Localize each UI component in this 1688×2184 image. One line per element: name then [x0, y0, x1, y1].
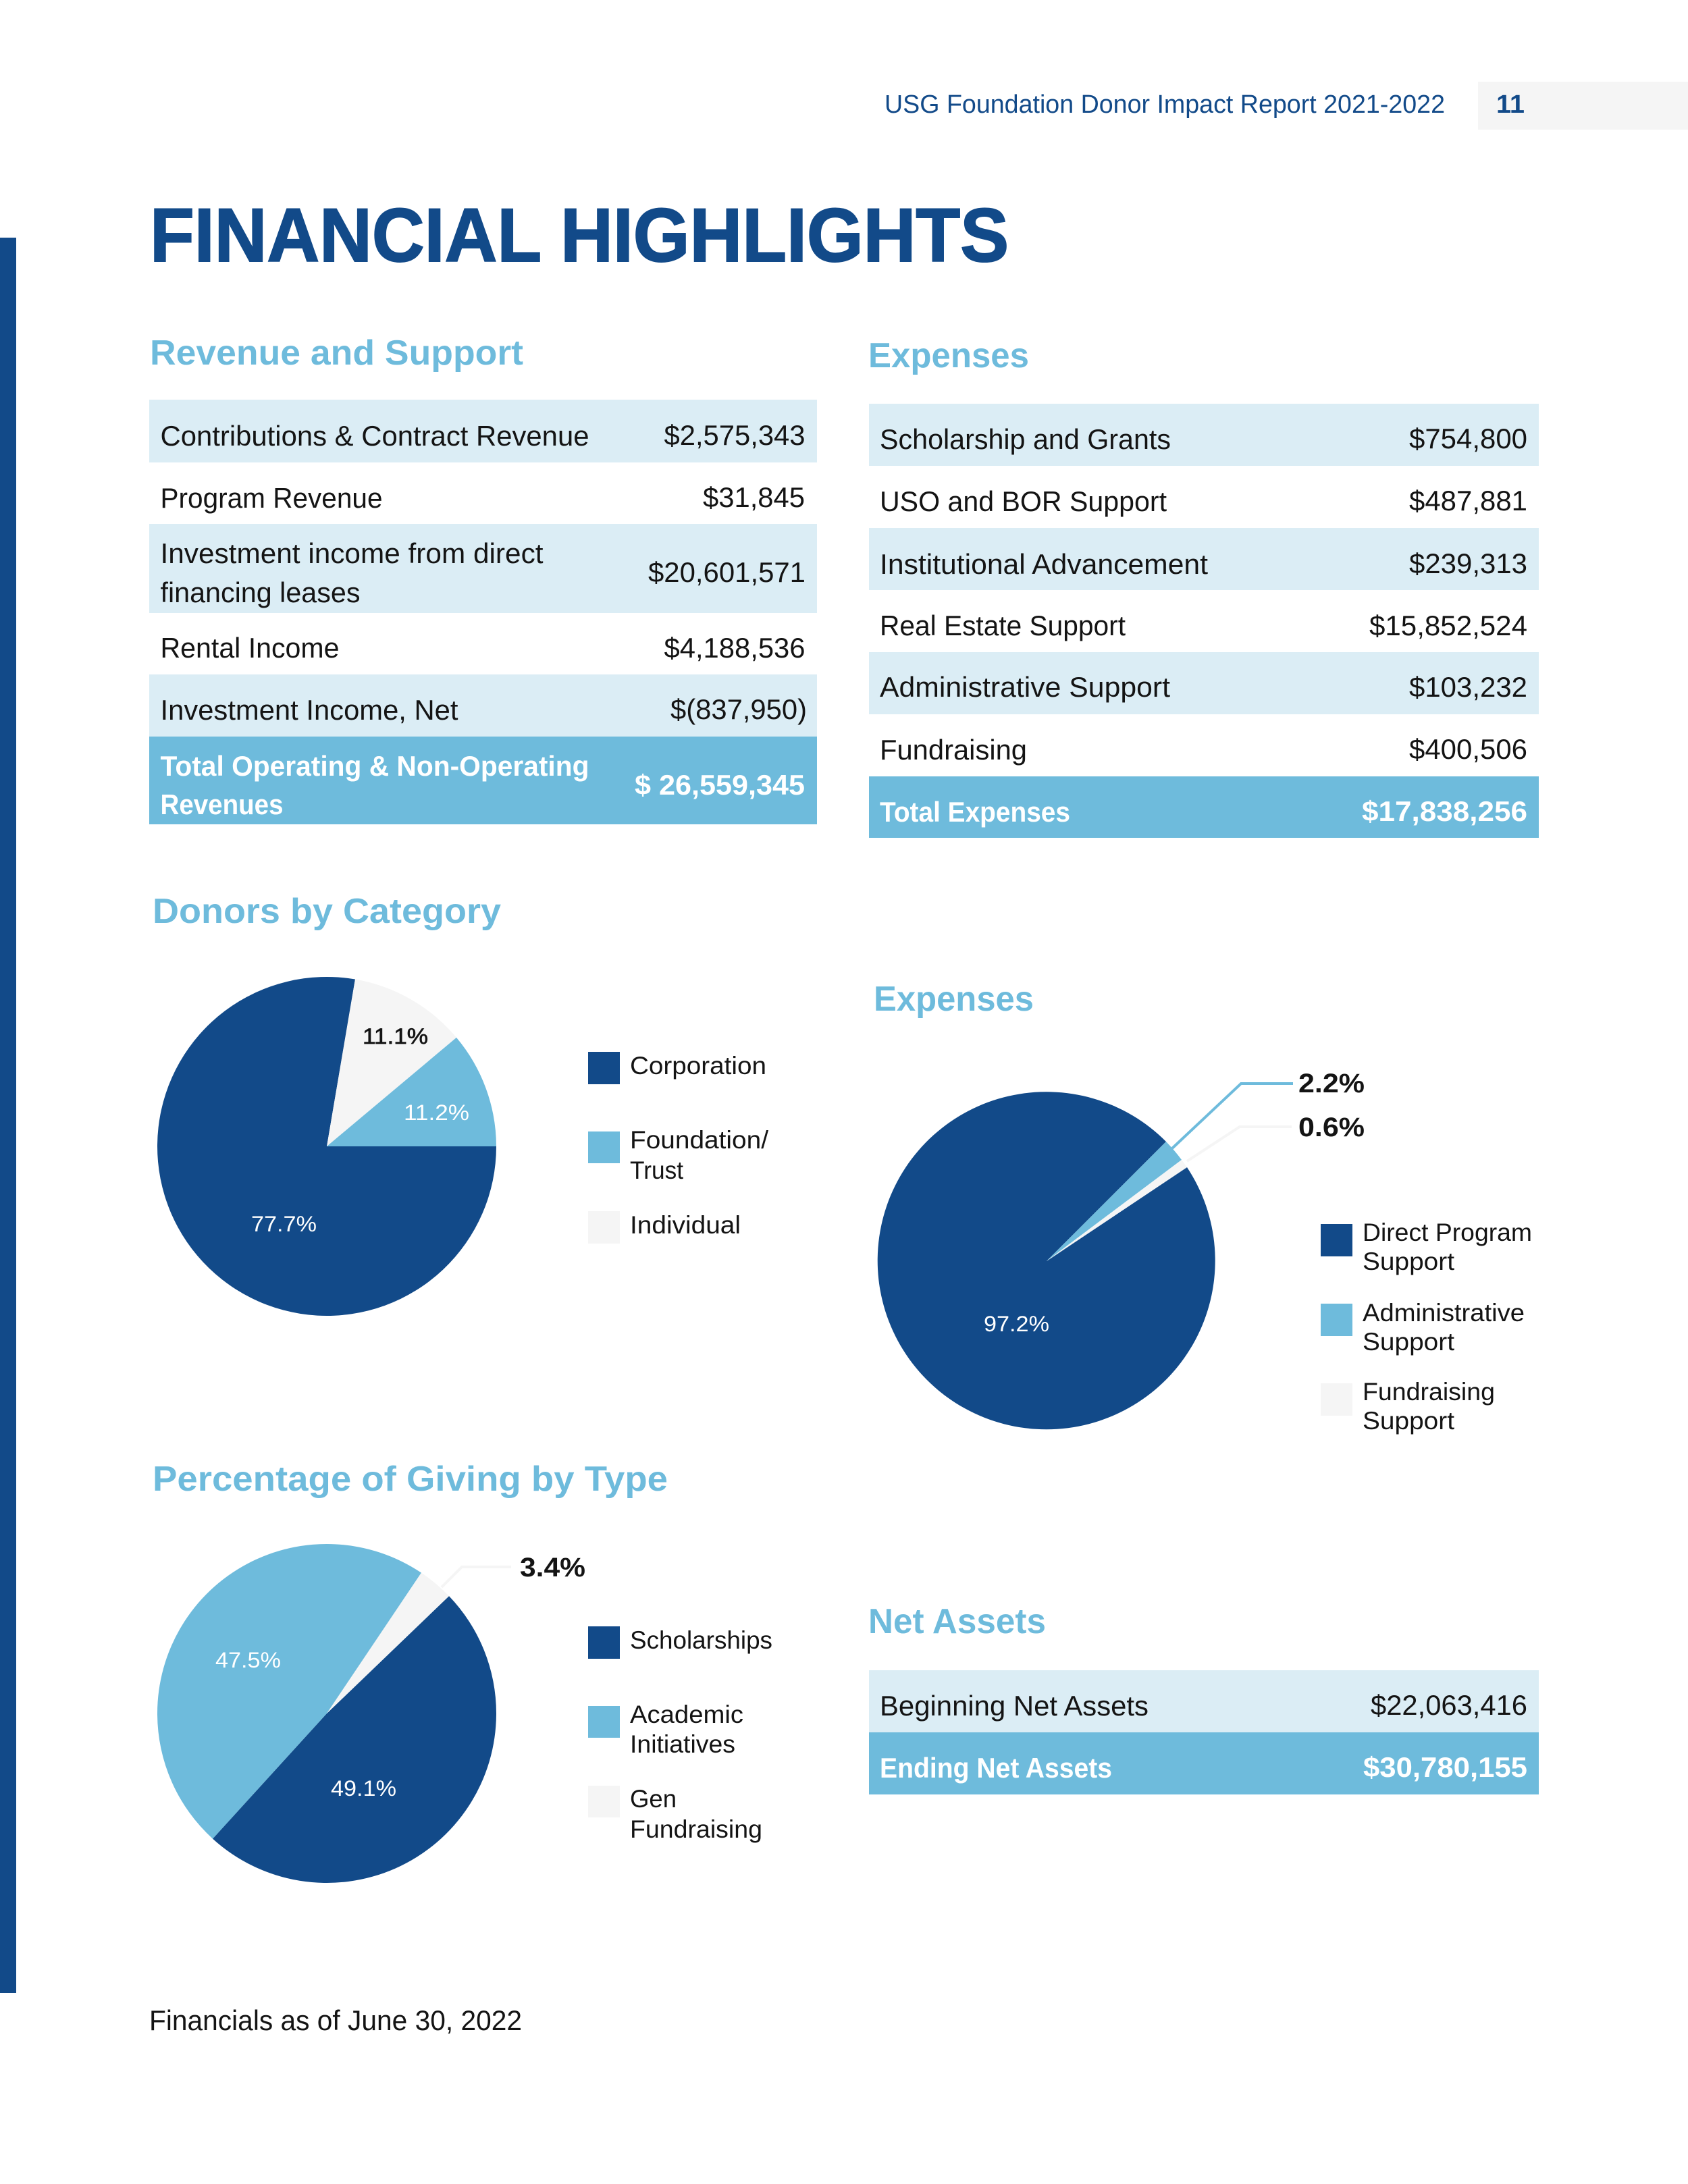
panel: donors by category — [153, 892, 769, 1316]
callout: 0.6 percent: 0.6% — [1298, 1113, 1365, 1142]
row: total revenues: Total Operating & Non-Operating — [161, 750, 589, 782]
pie chart: giving: 47.5% — [215, 1648, 281, 1672]
pie chart: donors: 11.1% — [363, 1024, 428, 1048]
row: contributions: Contributions & Contract Revenue — [161, 420, 589, 452]
callout: 2.2 percent: 2.2% — [1298, 1069, 1365, 1098]
row: investment income net: $(837,950) — [670, 693, 807, 725]
legend: expenses: Direct Program — [1363, 1219, 1532, 1246]
row: rental income — [161, 632, 805, 664]
legend: expenses — [1321, 1219, 1532, 1435]
callout: 3.4 percent — [442, 1553, 585, 1587]
legend: giving: Academic — [630, 1701, 743, 1728]
row: real estate support: Real Estate Support — [880, 610, 1126, 641]
pie chart: donors: 11.2% — [404, 1100, 469, 1125]
legend: expenses: Support — [1363, 1407, 1455, 1435]
legend: giving: Fundraising — [630, 1815, 762, 1843]
row: ending net assets — [869, 1732, 1539, 1794]
row: beginning net assets: $22,063,416 — [1371, 1689, 1527, 1721]
row: total revenues: $ 26,559,345 — [635, 769, 805, 801]
row: institutional advancement: Institutional Advancement — [880, 548, 1208, 580]
row: investment income from direct financing leases: $20,601,571 — [648, 556, 806, 588]
row: real estate support — [880, 610, 1527, 641]
row: investment income from direct financing leases: financing leases — [161, 577, 361, 608]
row: program revenue: Program Revenue — [161, 482, 382, 514]
row: program revenue: $31,845 — [703, 481, 805, 513]
left accent bar — [0, 238, 16, 1993]
legend: donors — [588, 1052, 769, 1244]
row: institutional advancement — [869, 528, 1539, 590]
row: investment income from direct financing leases — [149, 524, 817, 613]
row: contributions — [149, 400, 817, 462]
row: fundraising: Fundraising — [880, 734, 1027, 766]
header report name: USG Foundation Donor Impact Report 2021-2022 — [885, 90, 1445, 119]
pie chart: giving — [157, 1544, 496, 1883]
heading: expenses: Expenses — [868, 336, 1029, 375]
panel: percentage of giving by type — [153, 1460, 772, 1883]
row: beginning net assets — [869, 1670, 1539, 1732]
row: administrative support: $103,232 — [1409, 671, 1527, 703]
pie chart: expenses — [878, 1092, 1215, 1429]
row: fundraising — [880, 733, 1527, 766]
heading: donors by category: Donors by Category — [153, 892, 501, 931]
row: total expenses — [869, 776, 1539, 838]
legend: giving — [588, 1626, 772, 1843]
legend: giving: Scholarships — [630, 1626, 772, 1654]
panel: net assets — [868, 1602, 1539, 1794]
callout: 3.4 percent: 3.4% — [520, 1553, 585, 1582]
legend: expenses: Administrative — [1363, 1299, 1525, 1327]
page number: 11 — [1496, 90, 1525, 119]
page header — [885, 82, 1688, 130]
header tab: page number background — [1478, 82, 1688, 130]
row: administrative support: Administrative Support — [880, 671, 1170, 703]
pie chart: giving: 49.1% — [331, 1776, 396, 1801]
row: total expenses: Total Expenses — [880, 796, 1070, 828]
row: scholarship and grants: $754,800 — [1409, 423, 1527, 454]
heading: percentage of giving: Percentage of Giving by Type — [153, 1460, 668, 1499]
legend: donors: Foundation/ — [630, 1126, 769, 1154]
row: program revenue — [161, 481, 805, 514]
row: uso and bor support: $487,881 — [1409, 485, 1527, 516]
heading: expenses chart: Expenses — [874, 980, 1034, 1019]
row: scholarship and grants: Scholarship and Grants — [880, 423, 1171, 455]
row: total revenues — [149, 737, 817, 824]
pie chart: donors — [157, 977, 496, 1316]
callout: 2.2 percent — [1172, 1069, 1365, 1148]
legend: donors: Corporation — [630, 1052, 766, 1080]
title: FINANCIAL HIGHLIGHTS — [150, 193, 1009, 277]
row: beginning net assets: Beginning Net Assets — [880, 1690, 1149, 1722]
row: ending net assets: $30,780,155 — [1363, 1751, 1527, 1783]
row: scholarship and grants — [869, 404, 1539, 466]
row: contributions: $2,575,343 — [664, 419, 805, 451]
row: uso and bor support: USO and BOR Support — [880, 485, 1167, 517]
row: institutional advancement: $239,313 — [1409, 548, 1527, 579]
row: fundraising: $400,506 — [1409, 733, 1527, 765]
row: rental income: $4,188,536 — [664, 632, 805, 664]
legend: donors: Individual — [630, 1211, 741, 1239]
heading: revenue and support: Revenue and Support — [150, 334, 523, 373]
panel: expenses table — [868, 336, 1539, 838]
heading: net assets: Net Assets — [868, 1602, 1046, 1641]
pie chart: expenses: 97.2% — [984, 1312, 1049, 1336]
row: total revenues: Revenues — [161, 789, 284, 820]
row: ending net assets: Ending Net Assets — [880, 1752, 1112, 1784]
row: administrative support — [869, 652, 1539, 714]
legend: giving: Gen — [630, 1785, 677, 1813]
row: rental income: Rental Income — [161, 632, 339, 664]
row: investment income net — [149, 674, 817, 737]
legend: giving: Initiatives — [630, 1730, 735, 1758]
panel: revenue and support — [149, 334, 817, 824]
row: investment income from direct financing leases: Investment income from direct — [161, 537, 544, 569]
legend: expenses: Support — [1363, 1328, 1455, 1356]
row: uso and bor support — [880, 485, 1527, 517]
legend: donors: Trust — [630, 1156, 684, 1184]
legend: expenses: Fundraising — [1363, 1378, 1495, 1406]
row: investment income net: Investment Income, Net — [161, 694, 458, 726]
row: total expenses: $17,838,256 — [1362, 795, 1527, 827]
panel: expenses pie — [874, 980, 1532, 1435]
callout: 0.6 percent — [1187, 1113, 1365, 1161]
footnote: Financials as of June 30, 2022 — [149, 2004, 522, 2036]
pie chart: donors: 77.7% — [251, 1212, 317, 1236]
legend: expenses: Support — [1363, 1248, 1455, 1275]
row: real estate support: $15,852,524 — [1369, 610, 1527, 641]
